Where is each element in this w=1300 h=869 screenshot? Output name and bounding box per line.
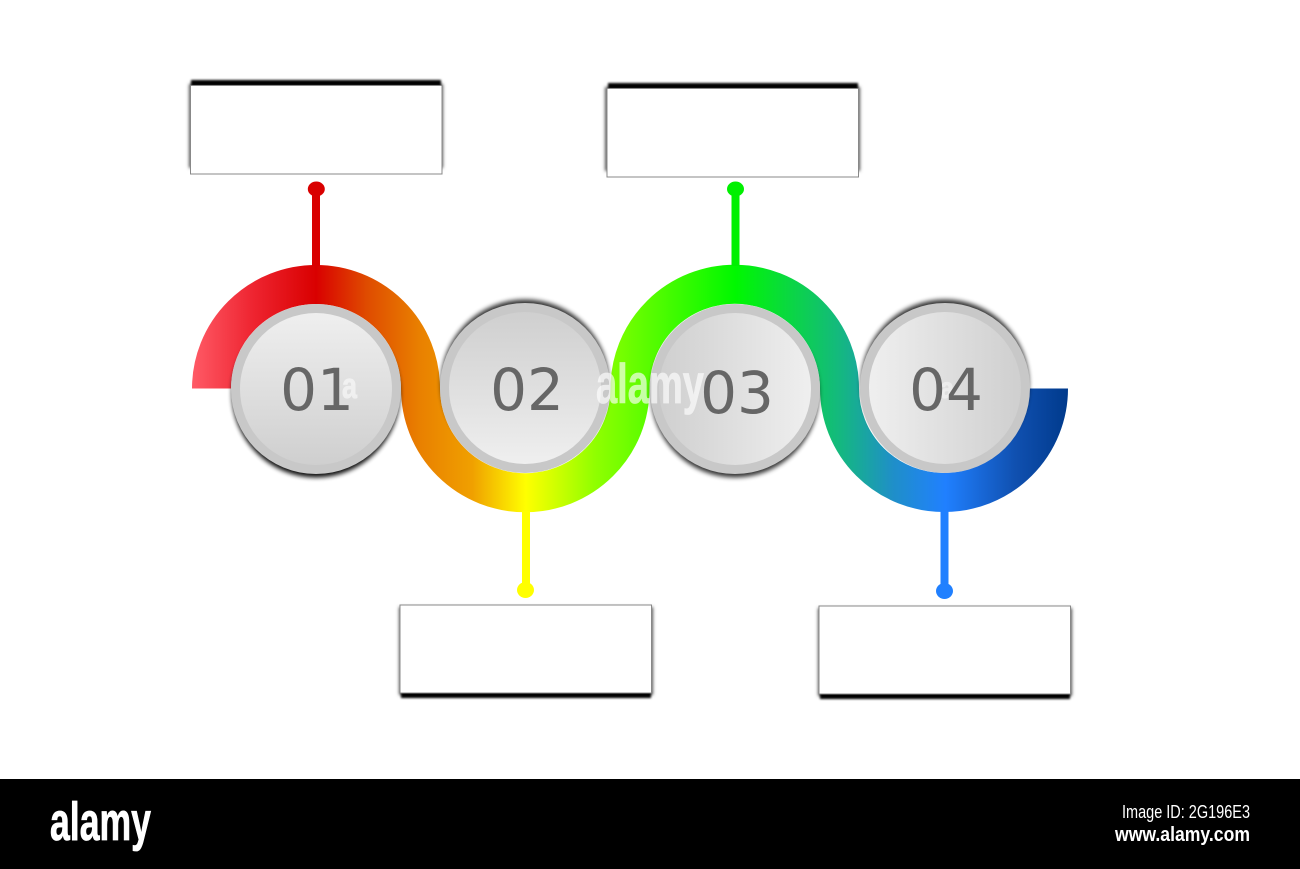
image id: Image ID: 2G196E3	[1122, 802, 1250, 822]
label box 01	[189, 80, 443, 174]
number 04: 04	[909, 356, 983, 424]
circle badge 02: 02	[490, 356, 564, 424]
watermark fragment near 04: a	[940, 372, 954, 405]
ribbon: rainbow wave	[212, 284, 1048, 493]
panel: step 04 connector and label box	[818, 511, 1072, 699]
circle badge 02	[440, 300, 610, 473]
number 01: 01	[280, 356, 354, 424]
circle badge 03	[650, 304, 820, 478]
panel: step 01 connector and label box	[189, 80, 443, 266]
circle badge 03: 03	[700, 359, 774, 427]
connector 03	[727, 182, 744, 266]
label box 02	[399, 605, 653, 698]
circle badge 01	[231, 304, 401, 478]
label box 04	[818, 606, 1072, 699]
footer bar	[0, 779, 1300, 869]
website: www.alamy.com	[1114, 824, 1250, 846]
circle badge 04	[860, 300, 1030, 473]
panel: step 03 connector and label box	[605, 83, 860, 266]
connector 01	[308, 182, 325, 266]
panel: step 02 connector and label box	[399, 511, 653, 698]
connector 04	[936, 511, 953, 599]
footer logo: alamy	[50, 792, 151, 852]
watermark: alamy: alamy	[596, 352, 704, 415]
connector 02	[517, 511, 534, 598]
label box 03	[605, 83, 860, 177]
watermark fragment near 01: a	[342, 365, 358, 406]
